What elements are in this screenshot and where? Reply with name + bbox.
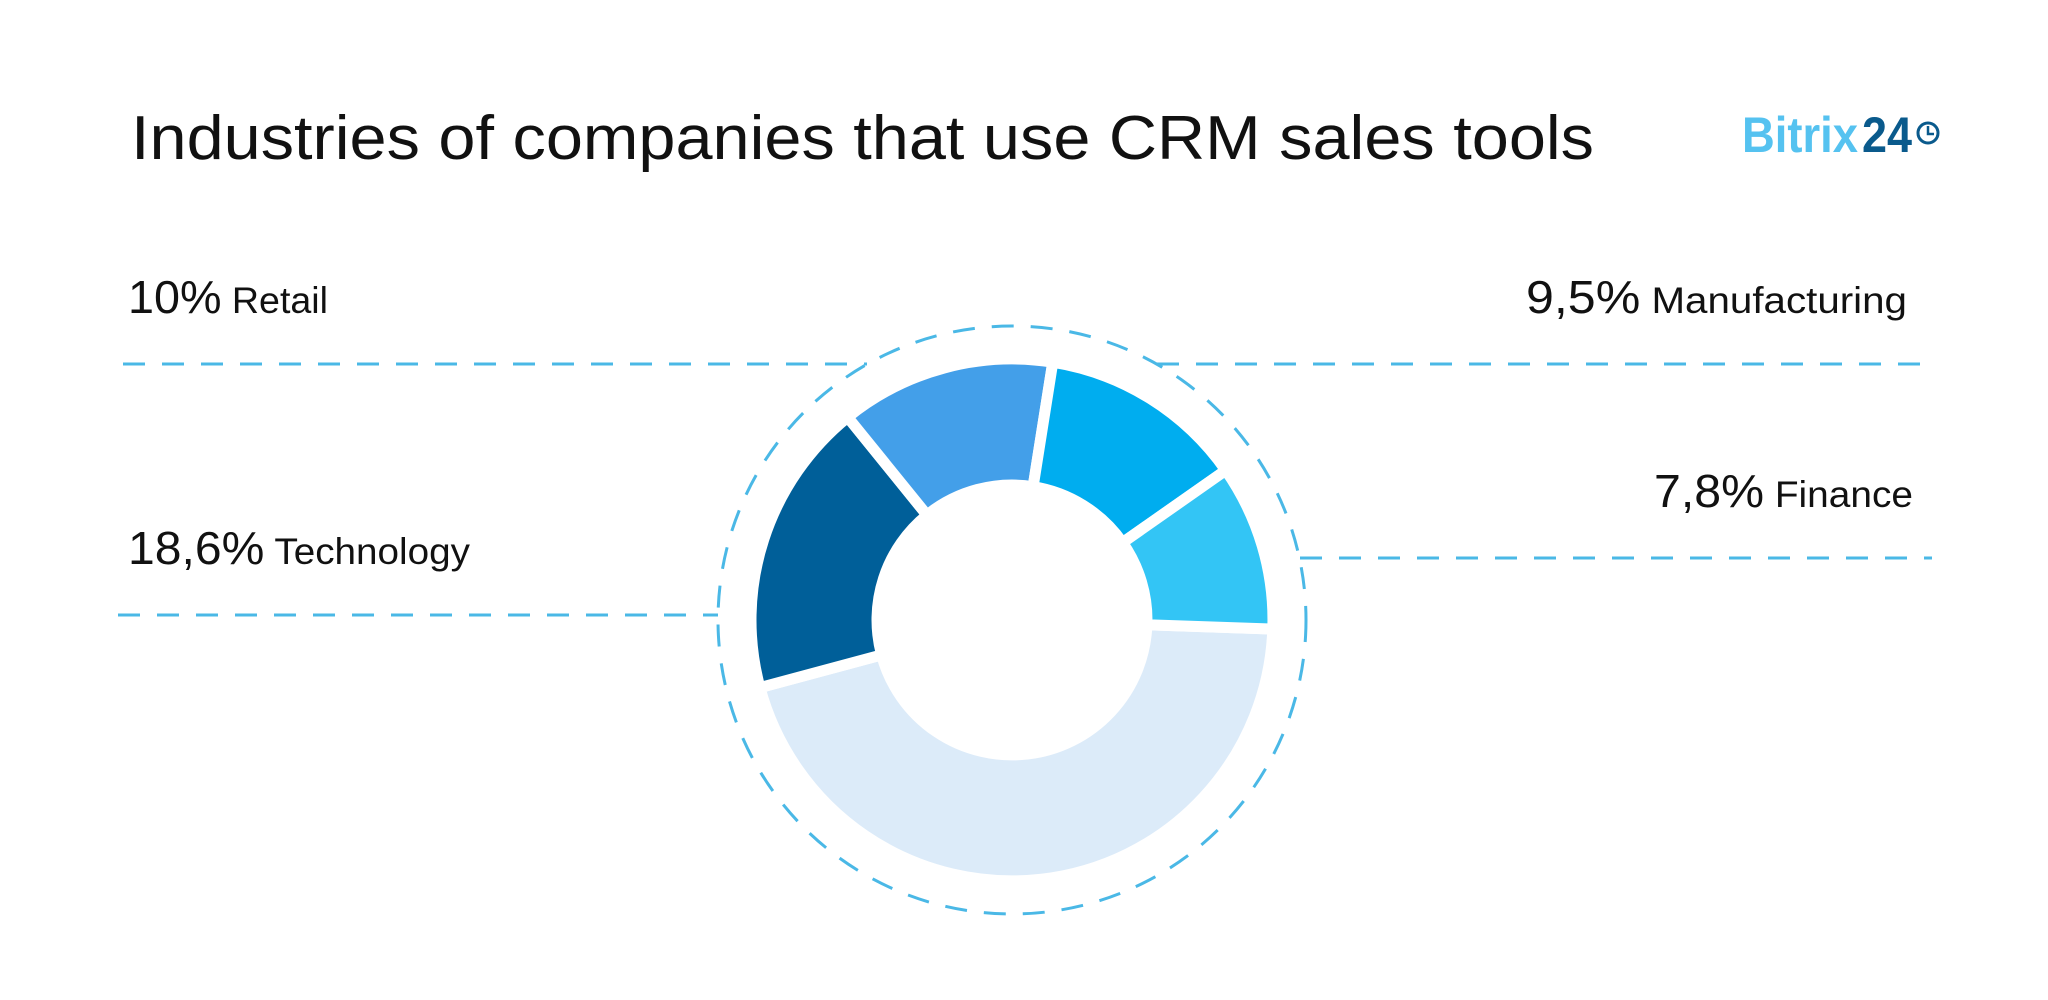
segment: retail	[848, 359, 1053, 515]
segment: finance	[1123, 470, 1273, 629]
segment: manufacturing	[1033, 362, 1226, 543]
dashed leader lines	[118, 364, 1932, 615]
logo: Bitrix24	[1742, 107, 1938, 163]
label: manufacturing: 9,5% Manufacturing	[1526, 271, 1907, 323]
title: Industries of companies that use CRM sales tools	[131, 104, 1594, 173]
dashed outer circle	[718, 326, 1306, 914]
segment: other (light)	[760, 625, 1273, 881]
label: finance: 7,8% Finance	[1654, 465, 1913, 517]
logo: Bitrix24: 24	[1862, 107, 1912, 163]
donut chart	[751, 359, 1273, 881]
logo: Bitrix24: Bitrix	[1742, 107, 1858, 163]
label: retail: 10% Retail	[128, 271, 328, 323]
label: technology: 18,6% Technology	[128, 522, 471, 574]
segment: technology	[751, 417, 927, 688]
